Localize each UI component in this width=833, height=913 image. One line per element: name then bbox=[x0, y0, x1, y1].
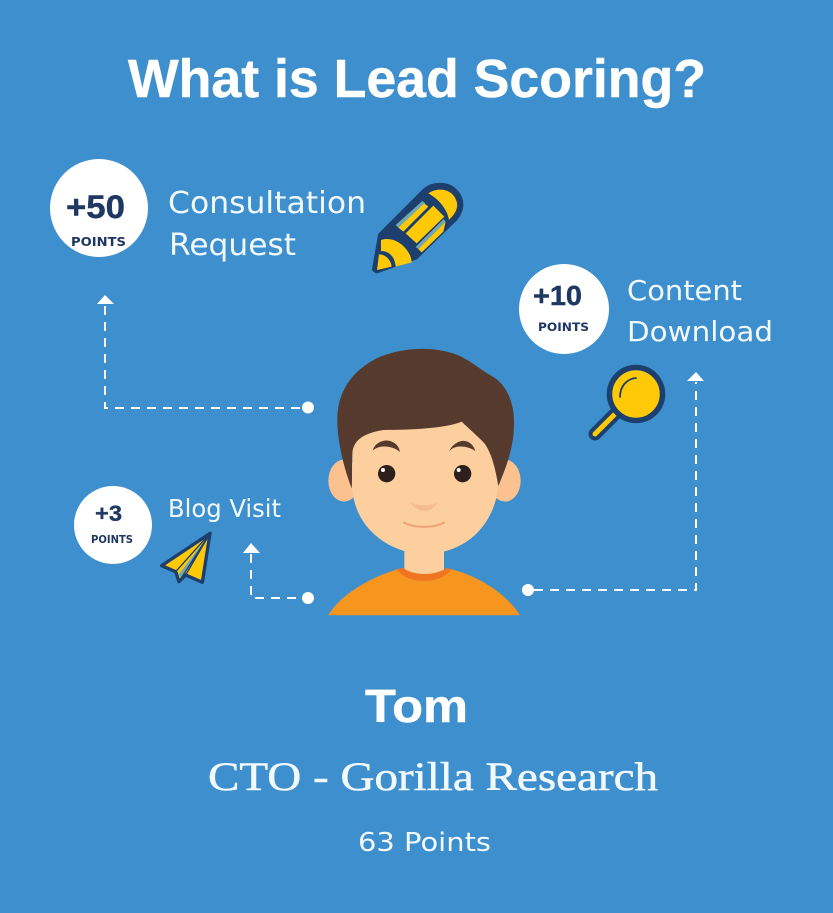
face bbox=[352, 417, 498, 554]
title: What is Lead Scoring? bbox=[128, 49, 706, 109]
shirt collar bbox=[397, 568, 452, 581]
label: Content Download bbox=[627, 274, 773, 348]
badge: +50 points: +50 bbox=[66, 189, 125, 225]
arrow: consultation request path bbox=[97, 295, 314, 414]
icon: pencil bbox=[374, 185, 461, 271]
label: Content Download: Content bbox=[627, 274, 742, 307]
hair bbox=[337, 349, 514, 488]
arrow: blog visit path bbox=[243, 543, 314, 604]
job title: CTO - Gorilla Research bbox=[208, 754, 658, 799]
eyebrows bbox=[373, 441, 475, 452]
label: Content Download: Download bbox=[627, 315, 773, 348]
badge: +50 points bbox=[50, 159, 148, 257]
person avatar bbox=[328, 349, 521, 615]
nose bbox=[411, 503, 437, 511]
badge: +3 points: +3 bbox=[95, 501, 122, 526]
badge: +10 points: POINTS bbox=[538, 320, 589, 334]
eyes bbox=[378, 465, 471, 482]
arrow: content download path bbox=[522, 372, 704, 596]
total points: 63 Points bbox=[358, 828, 491, 858]
badge: +10 points: +10 bbox=[533, 280, 582, 311]
name: Tom bbox=[365, 680, 468, 732]
ears bbox=[328, 460, 521, 502]
badge: +50 points: POINTS bbox=[71, 235, 126, 249]
label: Consultation Request bbox=[168, 186, 366, 263]
icon: magnifying glass bbox=[595, 368, 662, 434]
neck bbox=[404, 540, 444, 577]
badge: +10 points bbox=[519, 264, 609, 354]
mouth bbox=[404, 523, 444, 527]
label: Consultation Request: Consultation bbox=[168, 186, 366, 221]
label: Consultation Request: Request bbox=[169, 228, 296, 263]
badge: +3 points: POINTS bbox=[91, 534, 133, 546]
badge: +3 points bbox=[74, 486, 152, 564]
label: Blog Visit: Blog Visit bbox=[168, 494, 281, 523]
shirt bbox=[328, 569, 520, 615]
icon: paper plane bbox=[162, 533, 210, 582]
